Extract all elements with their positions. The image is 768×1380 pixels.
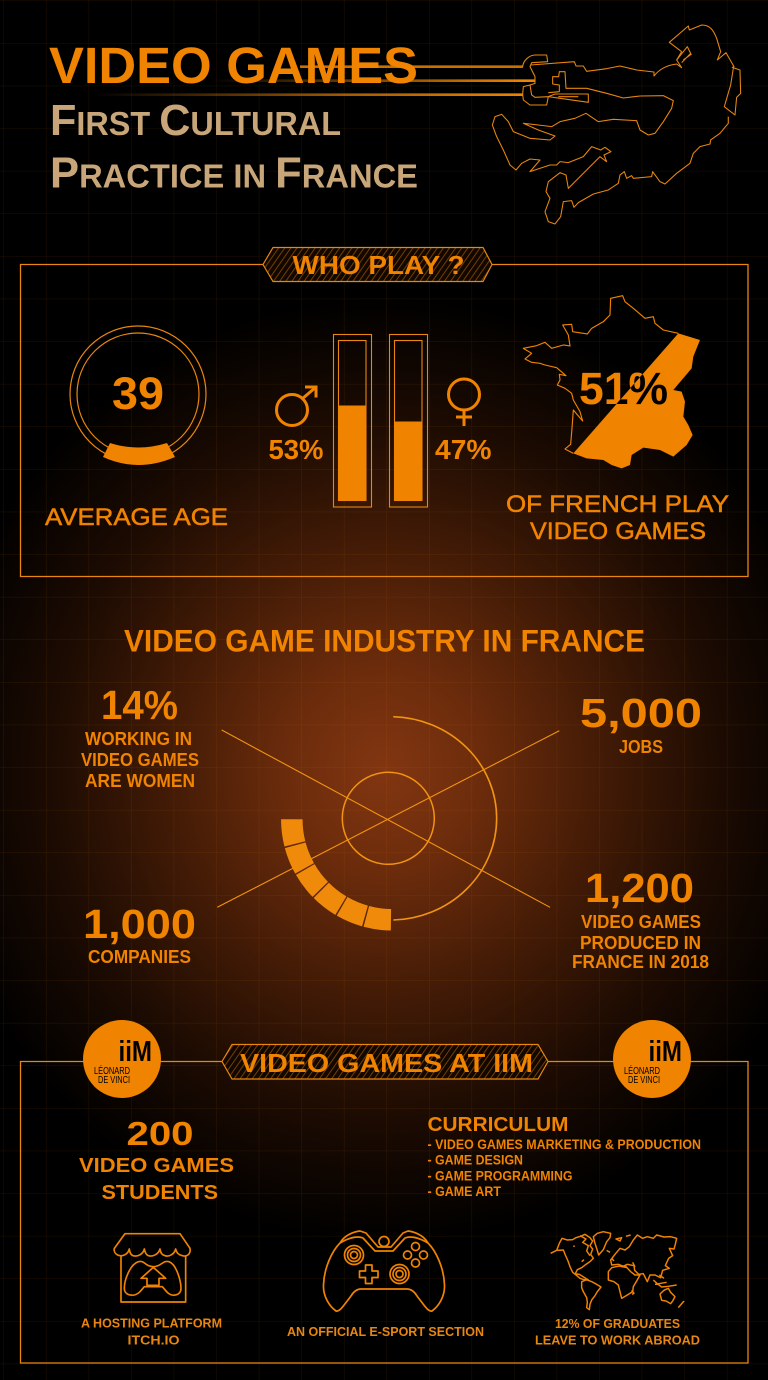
label: of french play video games: OF FRENCH PLAY — [506, 491, 729, 518]
stat: students — [79, 1115, 234, 1204]
caption: graduates abroad: LEAVE TO WORK ABROAD — [535, 1334, 700, 1348]
stat: male share: 53% — [268, 434, 324, 465]
stat: students: 200 — [126, 1115, 194, 1152]
stat: jobs: 5,000 — [580, 690, 702, 736]
banner: who play — [263, 248, 492, 282]
text: curriculum: - GAME PROGRAMMING — [428, 1168, 572, 1184]
icon: male symbol — [276, 387, 316, 426]
logo: iim right — [613, 1020, 691, 1098]
logo: iim left: LÉONARD — [94, 1064, 130, 1077]
stat: female share: 47% — [435, 434, 492, 465]
text: curriculum: CURRICULUM — [428, 1113, 568, 1136]
caption: hosting platform: A HOSTING PLATFORM — [81, 1316, 222, 1330]
caption: hosting platform: ITCH.IO — [128, 1334, 180, 1348]
stat: games produced: PRODUCED IN — [580, 933, 701, 953]
text: curriculum: - GAME ART — [428, 1184, 502, 1199]
map: france: 51% — [579, 363, 668, 414]
chart: industry radial diagram — [217, 717, 559, 920]
stat: games produced: FRANCE IN 2018 — [572, 952, 709, 972]
label: average age: AVERAGE AGE — [45, 504, 228, 531]
stat: games produced — [572, 865, 709, 972]
stat: companies: COMPANIES — [88, 947, 191, 967]
stat: students: VIDEO GAMES — [79, 1154, 234, 1177]
heading: industry: VIDEO GAME INDUSTRY IN FRANCE — [124, 622, 645, 658]
laser beams from the gun — [93, 67, 535, 95]
label: of french play video games: VIDEO GAMES — [530, 518, 706, 545]
text: curriculum: - GAME DESIGN — [428, 1152, 523, 1168]
logo: iim left — [83, 1020, 161, 1098]
bar: female — [390, 334, 428, 507]
panel: video games at iim — [20, 1020, 748, 1363]
title line: video games: VIDEO GAMES — [49, 37, 418, 94]
caption: e-sport section: AN OFFICIAL E-SPORT SECTION — [287, 1325, 484, 1339]
gauge: average age: 39 — [112, 368, 164, 419]
icon: itch.io storefront — [114, 1234, 190, 1302]
stat: companies: 1,000 — [83, 901, 196, 947]
stat: companies — [83, 901, 196, 967]
subtitle line 2: PRACTICE IN FRANCE — [50, 148, 418, 198]
panel frame — [20, 1062, 748, 1363]
icon: female symbol — [448, 379, 480, 426]
map: france — [523, 296, 700, 468]
title — [49, 37, 418, 198]
logo: iim right: DE VINCI — [628, 1075, 660, 1086]
stat: women share: VIDEO GAMES — [81, 750, 199, 770]
banner: video games at iim: VIDEO GAMES AT IIM — [240, 1048, 533, 1078]
logo: iim left: iiM — [118, 1036, 152, 1068]
gauge: average age — [70, 326, 206, 465]
icon: game controller — [323, 1231, 445, 1311]
text: curriculum: - VIDEO GAMES MARKETING & PRODUCTION — [428, 1137, 701, 1152]
bar: male — [334, 334, 372, 507]
stat: women share: WORKING IN — [85, 729, 192, 749]
panel: who play — [20, 248, 748, 576]
logo: iim right: LÉONARD — [624, 1064, 660, 1077]
icon: world map — [551, 1232, 684, 1310]
icon: astronaut silhouette with gun — [492, 25, 741, 224]
map: france: 51% — [579, 363, 668, 414]
stat: jobs: JOBS — [619, 737, 663, 757]
stat: women share: 14% — [101, 682, 178, 728]
panel frame — [20, 264, 748, 576]
stat: games produced: 1,200 — [585, 865, 694, 911]
stat: games produced: VIDEO GAMES — [581, 912, 701, 932]
stat: students: STUDENTS — [102, 1181, 218, 1204]
text: curriculum — [428, 1113, 701, 1199]
stat: women share: ARE WOMEN — [85, 771, 195, 791]
caption: hosting platform — [81, 1316, 222, 1348]
stat: jobs — [580, 690, 702, 757]
logo: iim right: iiM — [648, 1036, 682, 1068]
stat: women share — [81, 682, 199, 791]
banner: who play: WHO PLAY ? — [292, 250, 464, 280]
caption: graduates abroad — [535, 1317, 700, 1348]
caption: graduates abroad: 12% OF GRADUATES — [555, 1317, 680, 1331]
subtitle line 1: FIRST CULTURAL — [50, 96, 341, 145]
label: of french play video games — [506, 491, 729, 545]
logo: iim left: DE VINCI — [98, 1075, 130, 1086]
